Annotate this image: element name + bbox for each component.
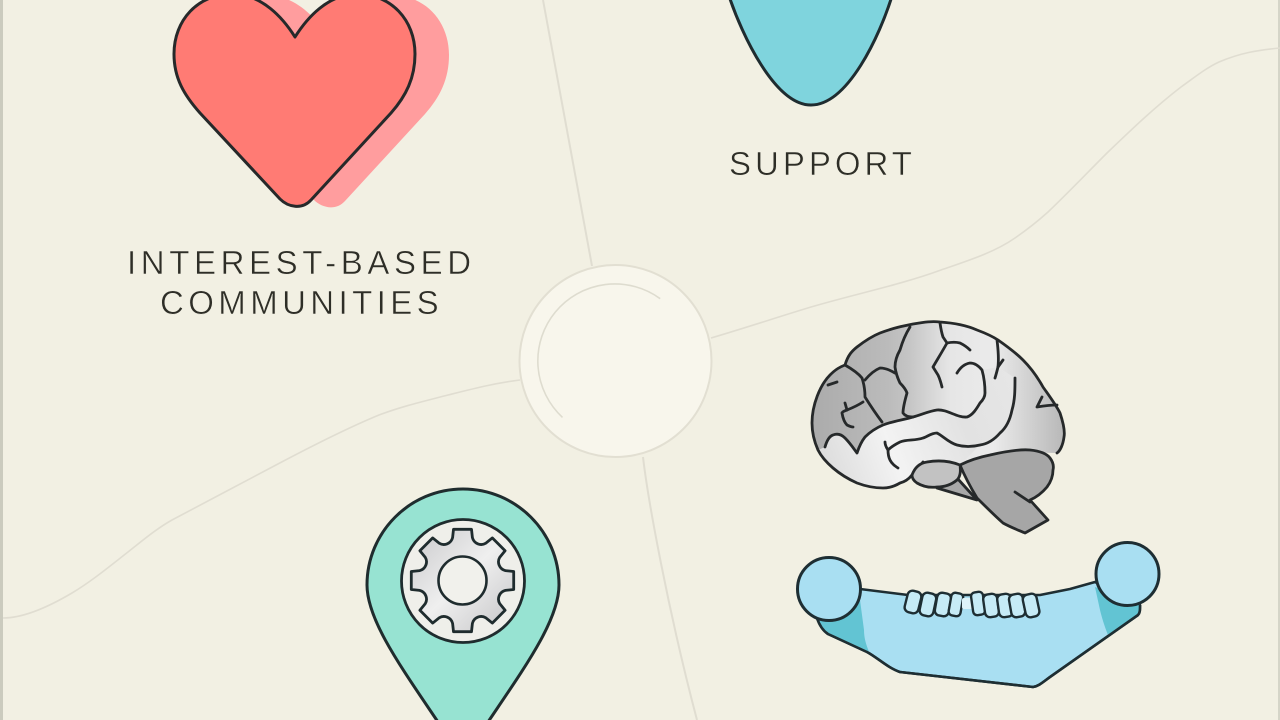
label: support: SUPPORT	[729, 145, 916, 182]
brain cerebellum	[960, 450, 1053, 533]
label: interest-based communities: INTEREST-BASED	[127, 244, 476, 281]
brain stem underside	[937, 478, 977, 500]
band outer edge	[817, 605, 1140, 687]
label: interest-based communities	[127, 244, 476, 321]
brain sulci lines	[825, 323, 1057, 468]
icon: location pin with gear	[367, 489, 559, 720]
label: interest-based communities: COMMUNITIES	[160, 284, 443, 321]
brain outline	[812, 322, 1064, 488]
icon: heart	[174, 0, 449, 207]
icon: hammock / jaw band	[798, 542, 1159, 687]
right ball	[1096, 542, 1159, 606]
band body	[817, 582, 1140, 687]
central hub circle	[520, 265, 712, 457]
pin body	[367, 489, 559, 720]
icon: brain	[812, 322, 1064, 533]
brain lower lighter band	[818, 367, 1015, 488]
brain cerebrum	[812, 322, 1064, 488]
gear	[411, 529, 514, 632]
knotted teeth in the middle	[904, 590, 1040, 618]
pin inner disc	[402, 520, 524, 642]
brain temporal lobe	[912, 461, 960, 487]
icon: support teardrop	[729, 0, 892, 105]
band left shaded end	[817, 600, 870, 654]
band right shaded end	[1095, 587, 1140, 635]
left ball	[798, 558, 860, 620]
